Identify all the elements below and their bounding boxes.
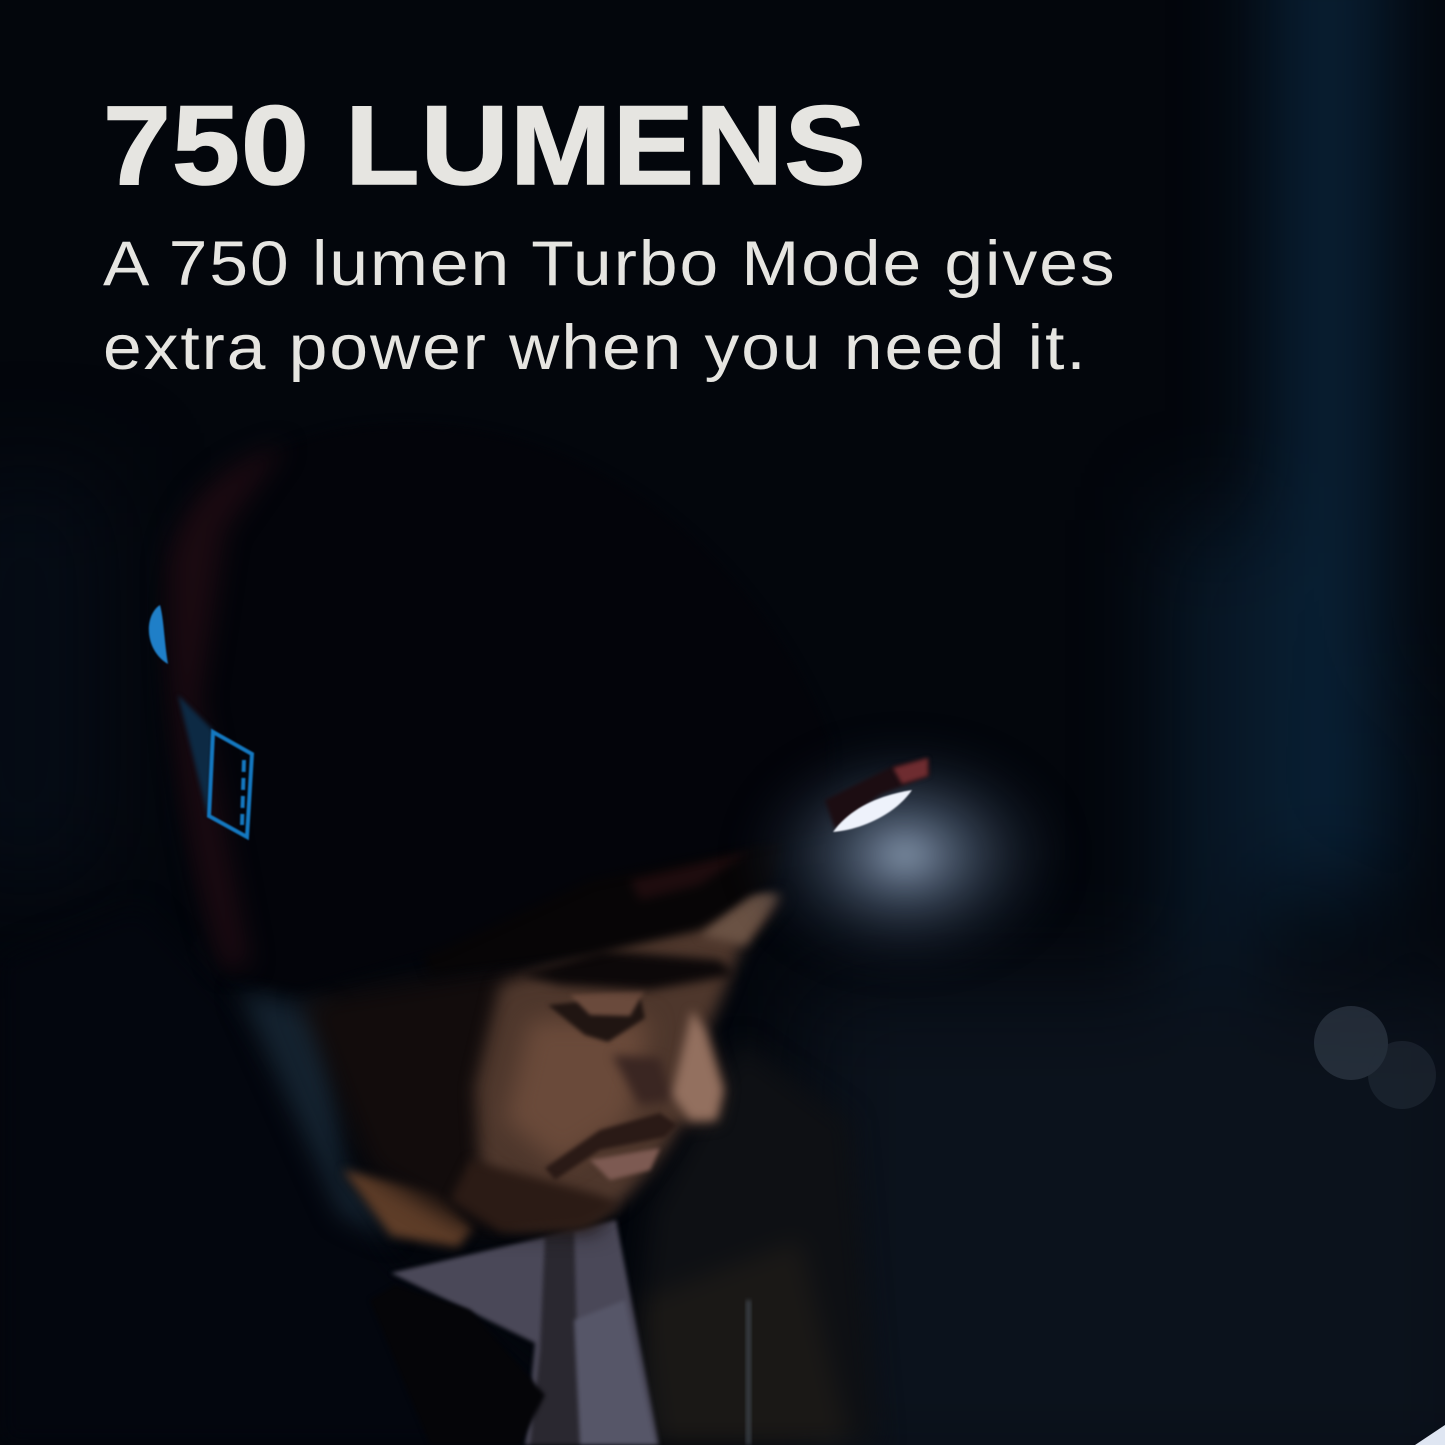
lamp housing	[825, 758, 930, 830]
beard	[450, 1160, 620, 1232]
lamp glow	[735, 730, 1075, 980]
neck	[343, 1170, 473, 1247]
corner light	[1415, 1425, 1445, 1445]
eyebrow	[520, 950, 735, 990]
description text	[103, 229, 1117, 383]
title: 750 LUMENS	[103, 83, 867, 208]
description text: extra power when you need it.	[103, 313, 1088, 383]
blue reflective clip	[149, 605, 168, 664]
lamp lens	[833, 790, 912, 832]
shirt	[391, 1220, 659, 1445]
mustache and lips	[545, 1113, 677, 1180]
beanie maroon rim	[168, 445, 285, 968]
forehead highlight	[700, 890, 780, 945]
zipper	[746, 1300, 751, 1445]
face lit side	[475, 895, 784, 1225]
hair	[400, 835, 785, 975]
beanie	[160, 425, 832, 990]
jacket left	[0, 905, 540, 1445]
jacket collar blue sheen	[238, 990, 395, 1240]
lens flares	[1314, 1006, 1436, 1109]
description text: A 750 lumen Turbo Mode gives	[103, 229, 1117, 299]
reflective rectangle on strap	[209, 732, 252, 837]
shoulder strap	[370, 1285, 545, 1445]
nose highlight	[612, 1010, 723, 1120]
headband	[178, 695, 213, 817]
jacket right	[625, 1040, 880, 1445]
eye and lashes	[548, 990, 645, 1042]
face dark side	[300, 965, 620, 1230]
